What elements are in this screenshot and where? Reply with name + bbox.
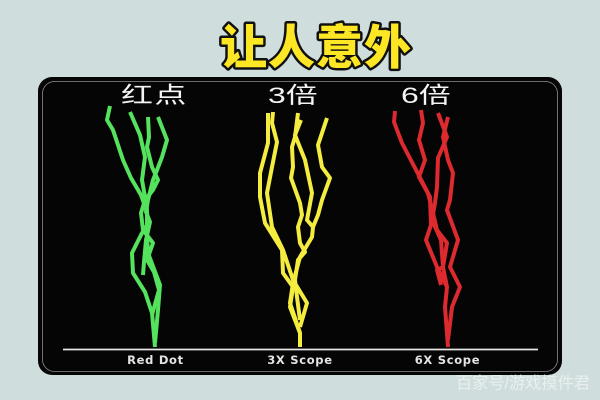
chart: red recoil trails — [394, 110, 460, 347]
chart: green recoil trails — [107, 106, 167, 347]
label: red dot: Red Dot — [127, 353, 184, 367]
heading: 6x: 6倍 — [401, 83, 451, 108]
title: 让人意外 — [220, 21, 412, 74]
baseline axis — [63, 348, 538, 350]
label: 3x scope: 3X Scope — [267, 353, 333, 367]
label: 6x scope: 6X Scope — [415, 353, 480, 367]
watermark: 百家号/游戏摸件君 — [456, 374, 590, 392]
chart: yellow recoil trails — [260, 112, 330, 347]
heading: red dot: 红点 — [121, 83, 188, 108]
panel: chart frame — [38, 77, 562, 375]
heading: 3x: 3倍 — [268, 83, 318, 108]
